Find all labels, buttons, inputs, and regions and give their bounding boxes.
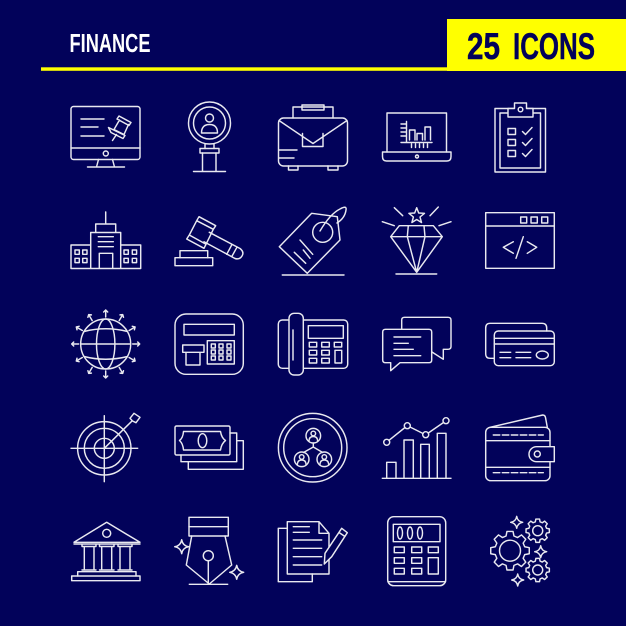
icon: fountain pen nib [175, 517, 244, 584]
icon: gavel [175, 217, 243, 266]
badge text: 25 [467, 26, 500, 67]
icon: documents with pencil [278, 522, 347, 582]
person right [317, 452, 332, 467]
badge background [447, 19, 626, 71]
icon: briefcase [278, 105, 348, 170]
icon: clipboard checklist [495, 103, 546, 172]
icon: monitor with pin [71, 106, 140, 167]
icon: diamond with star [382, 207, 451, 274]
icon: code window [486, 213, 554, 268]
icon: chat bubbles [383, 317, 451, 371]
icon: globe with arrows [72, 310, 140, 378]
icon: magnifier person sign [188, 102, 230, 172]
icon: desk telephone [278, 313, 348, 375]
icon: office buildings [71, 212, 141, 268]
icon: laptop with chart [382, 113, 451, 161]
badge text [467, 26, 595, 67]
icon: credit cards [486, 323, 554, 366]
icon: price tag [279, 207, 346, 275]
icon: target with dart [71, 413, 140, 482]
person top [306, 428, 321, 443]
icon: gears with sparkles [491, 516, 549, 586]
icon: team network circle [278, 413, 347, 482]
header band [41, 19, 626, 71]
icon: bank building [72, 522, 140, 581]
icon: banknotes [175, 426, 243, 469]
person left [294, 452, 309, 467]
title: FINANCE [70, 28, 150, 58]
icon: calculator [388, 517, 446, 586]
icon: payment terminal [175, 314, 243, 374]
icon: bar chart with trend line [382, 418, 451, 478]
header rule [41, 67, 447, 71]
icon: wallet [486, 415, 554, 481]
